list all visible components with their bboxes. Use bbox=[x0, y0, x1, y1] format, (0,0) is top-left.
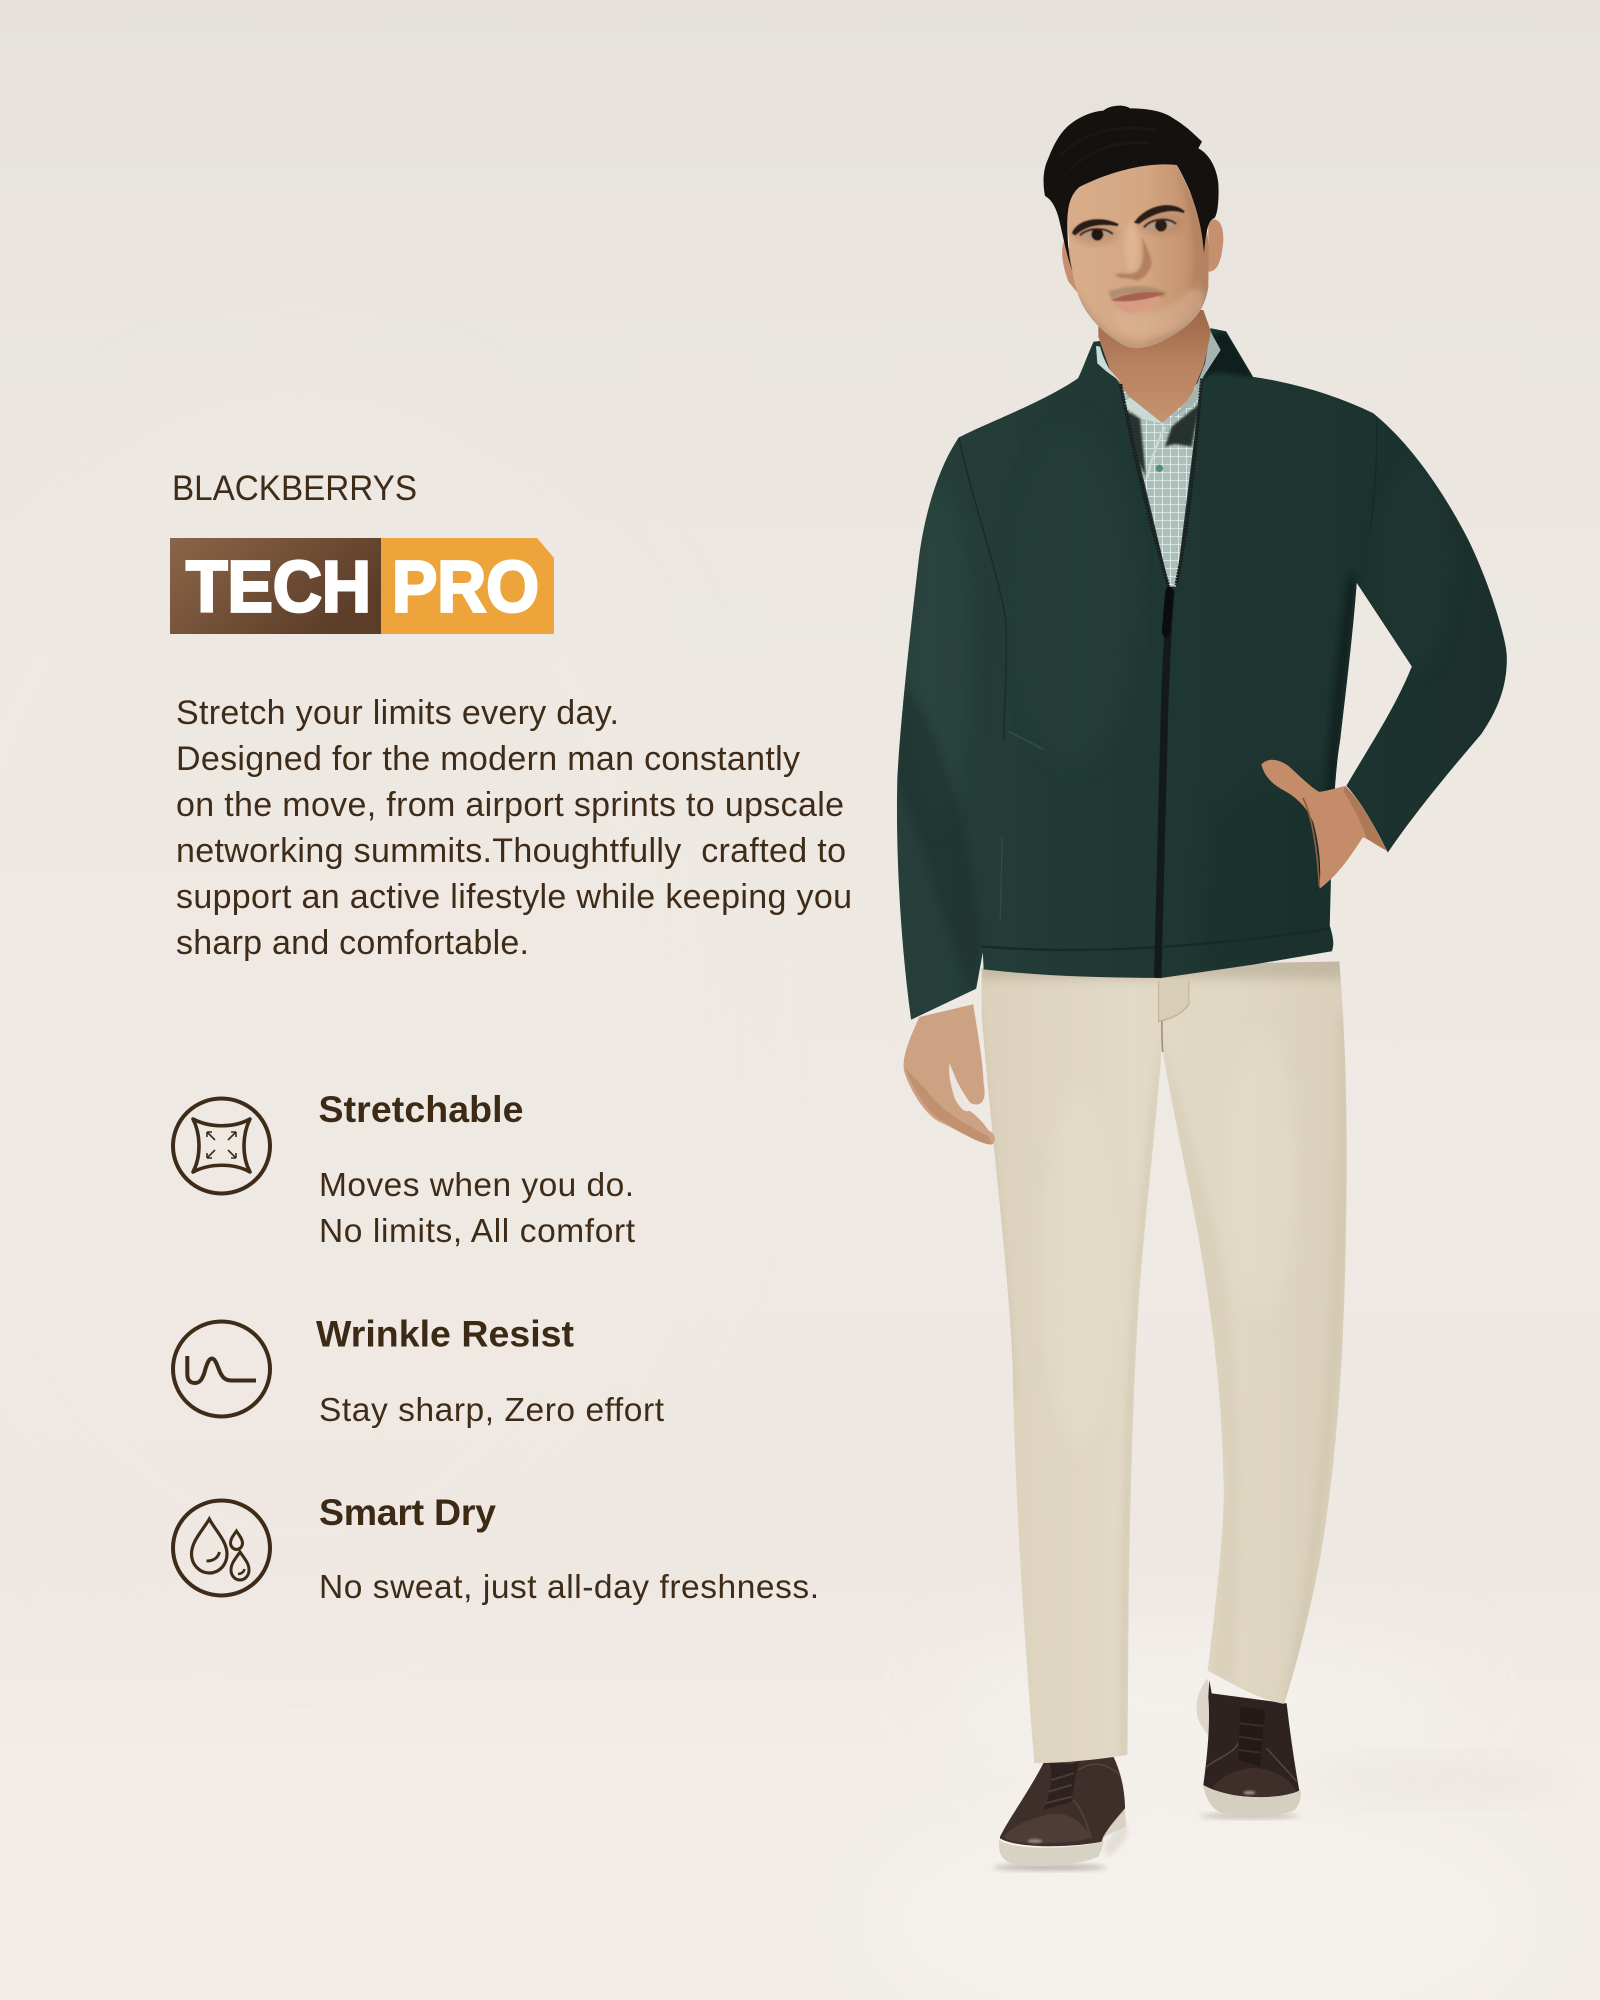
text: stretchable description: Moves when you do. bbox=[319, 1167, 634, 1204]
jacket bbox=[897, 328, 1507, 1020]
text: stretchable description: No limits, All comfort bbox=[319, 1213, 636, 1250]
text: smart dry description: No sweat, just all-day freshness. bbox=[319, 1569, 819, 1606]
face bbox=[1067, 164, 1209, 348]
feature: stretchable bbox=[173, 1088, 636, 1250]
heading: wrinkle resist: Wrinkle Resist bbox=[316, 1312, 574, 1354]
description paragraph: networking summits.Thoughtfully crafted to bbox=[176, 832, 846, 870]
left hand bbox=[904, 1004, 995, 1145]
gap between thumb and finger bbox=[949, 1064, 970, 1111]
description paragraph: Stretch your limits every day. bbox=[176, 694, 619, 732]
description paragraph: Designed for the modern man constantly bbox=[176, 740, 800, 778]
heading: smart dry: Smart Dry bbox=[319, 1491, 496, 1533]
jacket zipper bbox=[1158, 589, 1171, 978]
description paragraph: support an active lifestyle while keeping you bbox=[176, 878, 852, 916]
eyes bbox=[1073, 206, 1184, 240]
left shoe bbox=[999, 1752, 1126, 1866]
description paragraph: sharp and comfortable. bbox=[176, 924, 529, 962]
shoes bbox=[993, 1678, 1301, 1870]
hair bbox=[1044, 106, 1219, 271]
feature: smart dry bbox=[173, 1491, 819, 1606]
head bbox=[1044, 106, 1223, 350]
trousers bbox=[975, 950, 1349, 1763]
icon: smooth wave bbox=[173, 1322, 270, 1416]
description paragraph: on the move, from airport sprints to upscale bbox=[176, 786, 844, 824]
shirt and neck bbox=[1096, 310, 1221, 587]
heading: stretchable: Stretchable bbox=[318, 1088, 524, 1130]
shirt collar bbox=[1096, 346, 1172, 426]
feature: wrinkle resist bbox=[173, 1312, 665, 1429]
text: stretchable description bbox=[319, 1167, 636, 1250]
trouser fly bbox=[1159, 981, 1189, 1021]
inner zipper tracks bbox=[1121, 379, 1202, 587]
description paragraph bbox=[176, 694, 852, 962]
nose bbox=[1115, 237, 1152, 280]
logo: Tech Pro: PRO bbox=[392, 548, 539, 628]
model figure bbox=[897, 106, 1507, 1870]
logo: Tech Pro bbox=[170, 538, 554, 634]
lips bbox=[1112, 292, 1165, 312]
ears bbox=[1208, 219, 1223, 272]
right hand in pocket bbox=[1261, 760, 1387, 889]
brand name: BLACKBERRYS bbox=[172, 469, 417, 508]
icon: water drops bbox=[173, 1500, 270, 1596]
text: wrinkle resist description: Stay sharp, Zero effort bbox=[319, 1392, 665, 1429]
logo: Tech Pro: TECH bbox=[186, 548, 371, 628]
icon: stretch fabric bbox=[173, 1098, 270, 1194]
right shoe bbox=[1197, 1678, 1301, 1816]
neck bbox=[1098, 310, 1212, 423]
